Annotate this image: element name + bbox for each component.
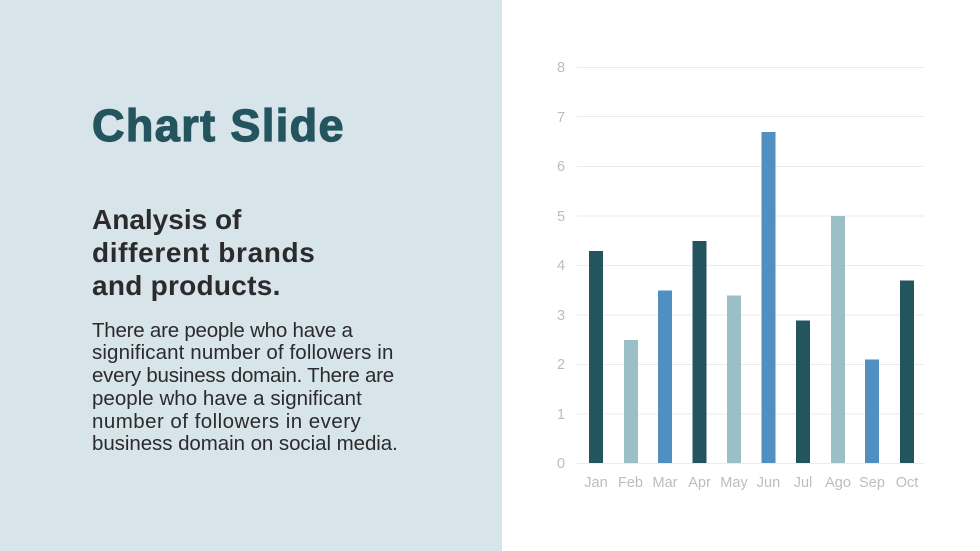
x axis labels: Oct xyxy=(896,475,918,491)
x axis labels xyxy=(584,475,918,491)
x axis labels: Jan xyxy=(584,475,608,491)
body text: number of followers in every xyxy=(92,410,361,433)
y axis labels: 8 xyxy=(557,60,565,76)
body text xyxy=(92,318,398,455)
x axis labels: Sep xyxy=(859,475,885,491)
subheading: and products. xyxy=(92,270,281,301)
y axis labels: 0 xyxy=(557,456,565,472)
x axis labels: Ago xyxy=(825,475,851,491)
subheading xyxy=(92,204,316,301)
bars xyxy=(589,132,914,463)
x axis labels: Apr xyxy=(688,475,711,491)
y axis labels: 4 xyxy=(557,258,565,274)
x axis labels: Mar xyxy=(653,475,678,491)
y axis labels: 3 xyxy=(557,308,565,324)
x axis labels: Jul xyxy=(794,475,812,491)
subheading: different brands xyxy=(92,237,316,268)
x axis labels: Jun xyxy=(757,475,780,491)
y axis labels: 6 xyxy=(557,159,565,175)
y axis labels: 7 xyxy=(557,110,565,126)
subheading: Analysis of xyxy=(92,204,241,235)
body text: people who have a significant xyxy=(92,387,362,410)
body text: business domain on social media. xyxy=(92,432,398,455)
panel: left background xyxy=(0,0,502,551)
y axis labels: 5 xyxy=(557,209,565,225)
y axis labels xyxy=(557,60,565,472)
x axis labels: May xyxy=(720,475,748,491)
y axis labels: 1 xyxy=(557,407,565,423)
title: Chart Slide xyxy=(92,100,345,151)
body text: There are people who have a xyxy=(92,318,353,342)
body text: significant number of followers in xyxy=(92,341,393,364)
y axis labels: 2 xyxy=(557,357,565,373)
body text: every business domain. There are xyxy=(92,364,394,387)
x axis labels: Feb xyxy=(618,475,643,491)
